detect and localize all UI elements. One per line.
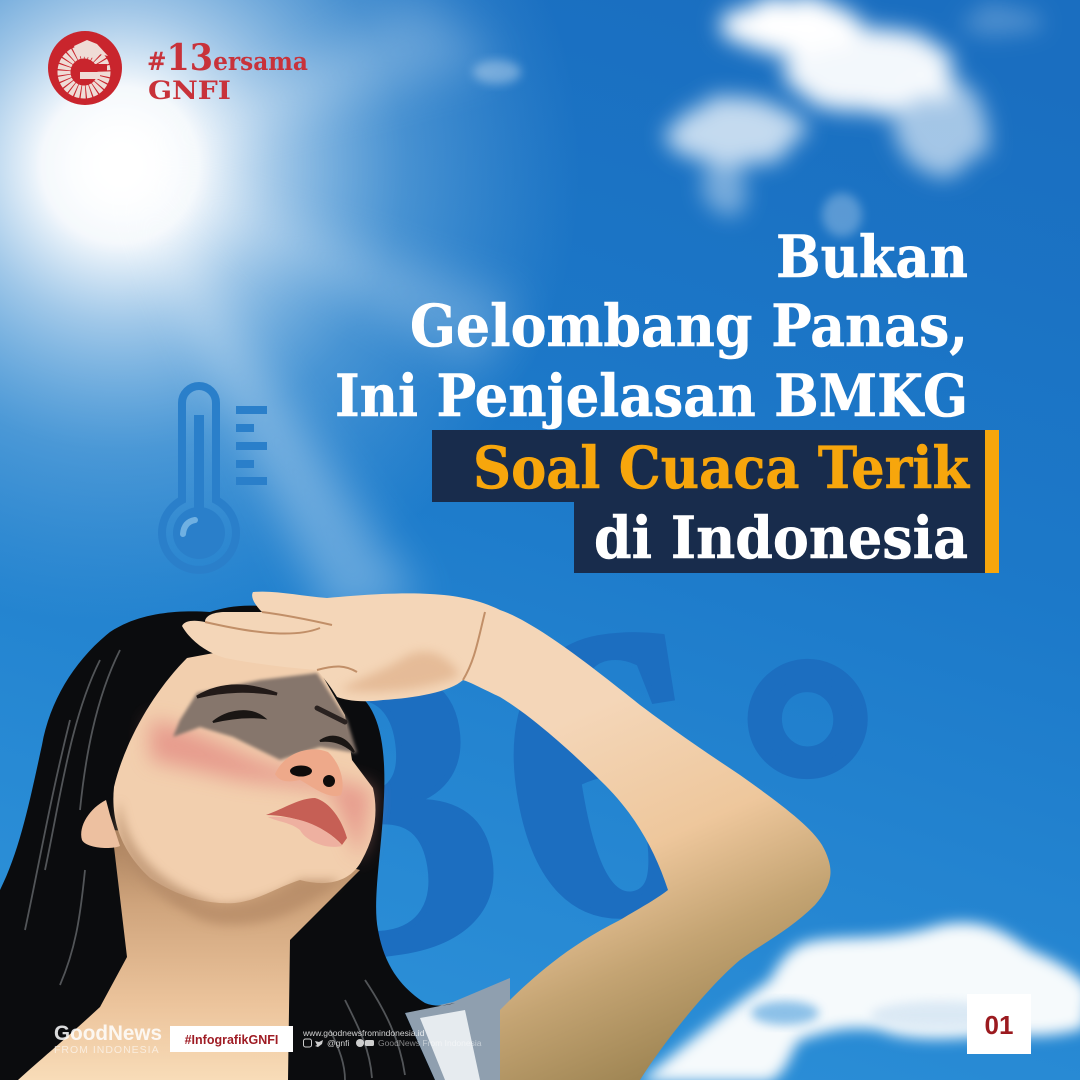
- ear: [81, 800, 120, 848]
- footer links and social icons: [303, 1030, 482, 1048]
- campaign wordmark: GNFI: [148, 76, 231, 105]
- title: Bukan: [776, 223, 968, 291]
- title panel: dark highlight and accent bar: [432, 430, 999, 573]
- hashtag badge: [170, 1026, 293, 1052]
- footer links and social icons: www.goodnewsfromindonesia.id: [302, 1028, 425, 1038]
- footer brand: GoodNews: [54, 1022, 162, 1045]
- footer brand: FROM INDONESIA: [54, 1044, 160, 1056]
- big faded temperature number: °: [724, 580, 904, 981]
- nose: [275, 749, 343, 796]
- hair: [0, 606, 455, 1080]
- footer brand: [54, 1024, 162, 1053]
- neck: [18, 830, 360, 1080]
- title: Soal Cuaca Terik: [473, 434, 971, 502]
- title: Ini Penjelasan BMKG: [335, 362, 968, 430]
- raised arm and hand: [182, 592, 830, 1080]
- facial shading: [117, 673, 372, 925]
- cloud: top right: [720, 0, 1040, 173]
- cloud: bottom right: [640, 923, 1080, 1080]
- page number badge: [967, 994, 1031, 1054]
- campaign wordmark: #13ersama: [147, 37, 308, 79]
- title: Gelombang Panas,: [410, 292, 968, 360]
- hashtag badge: #InfografikGNFI: [185, 1033, 278, 1047]
- big faded temperature number: [366, 632, 868, 957]
- campaign wordmark: [148, 42, 308, 100]
- sun glow and rays: [0, 0, 539, 598]
- cloud: small under top: [822, 193, 862, 237]
- footer links and social icons: @gnfi: [327, 1038, 349, 1048]
- shirt: [405, 978, 510, 1080]
- cloud: middle: [665, 98, 805, 213]
- page number badge: 01: [985, 1010, 1013, 1040]
- woman looking at the sky: [0, 592, 830, 1080]
- cloud: small top: [473, 60, 521, 84]
- title: di Indonesia: [594, 504, 968, 572]
- logo badge: [48, 31, 122, 105]
- lips: [266, 798, 347, 847]
- title: [335, 223, 971, 572]
- big faded temperature number: 36: [252, 530, 746, 1051]
- face: [113, 650, 375, 903]
- icon: thermometer: [162, 386, 267, 570]
- footer links and social icons: GoodNews From Indonesia: [378, 1038, 482, 1048]
